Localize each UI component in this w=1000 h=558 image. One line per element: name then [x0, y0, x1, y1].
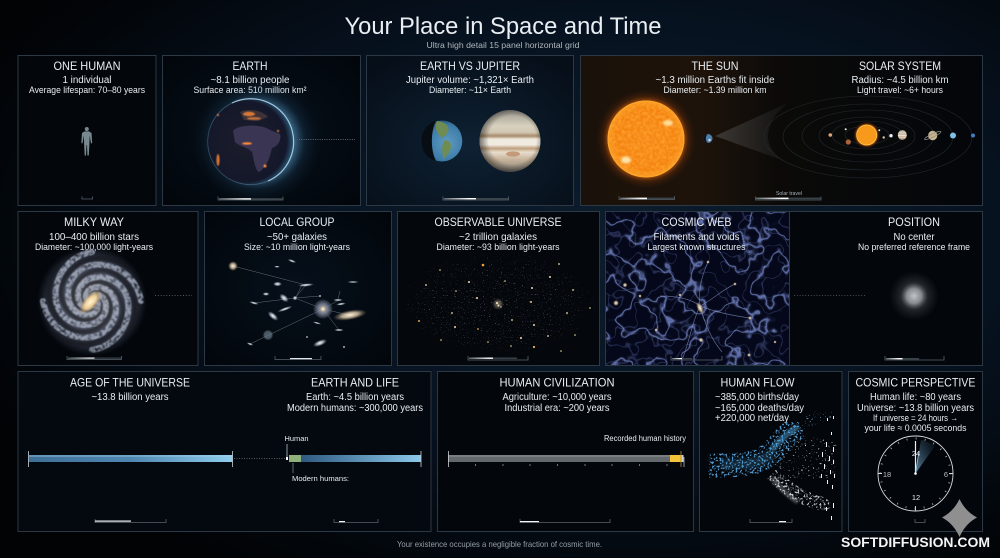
heading: human flow: HUMAN FLOW	[720, 376, 795, 390]
heading: position: POSITION	[888, 215, 940, 229]
stat: size: Size: ~10 million light-years	[244, 242, 350, 253]
label: modern humans: Modern humans:	[292, 474, 349, 483]
scale bar: universe	[468, 356, 528, 360]
chart: galaxy network	[228, 258, 368, 349]
icon: small earth	[704, 134, 712, 143]
stat: surface area: Surface area: 510 million km²	[194, 85, 306, 96]
chart: civilization timeline	[448, 451, 684, 467]
zoom cone	[715, 102, 804, 168]
panel: one human	[18, 56, 156, 206]
scale bar: civilization	[520, 519, 610, 522]
chart: universe age bar	[28, 451, 232, 467]
stat: individual: 1 individual	[62, 75, 112, 86]
panel: sun and solar system	[580, 56, 982, 206]
scale bar: position	[885, 356, 944, 360]
heading: cosmic perspective: COSMIC PERSPECTIVE	[856, 376, 976, 390]
heading: local group: LOCAL GROUP	[260, 215, 334, 229]
stat: jupiter volume: Jupiter volume: ~1,321× Earth	[406, 75, 534, 86]
label: recorded history: Recorded human history	[604, 434, 686, 443]
stat: modern humans: Modern humans: ~300,000 years	[287, 403, 423, 414]
illustration: galaxy field	[398, 251, 598, 355]
chart: 24-hour clock	[878, 436, 953, 511]
stat: industrial era: Industrial era: ~200 years	[504, 403, 610, 414]
stat: radius: Radius: ~4.5 billion km	[852, 75, 948, 86]
scale bar: human	[82, 196, 92, 199]
stat: structures: Largest known structures	[648, 242, 746, 253]
label: human: Human	[284, 434, 308, 443]
subtitle: Ultra high detail 15 panel horizontal grid	[426, 41, 580, 50]
connector: dotted line	[299, 138, 355, 140]
footer note: Your existence occupies a negligible fraction of cosmic time.	[397, 540, 602, 549]
chart: 24-hour clock: 12	[912, 493, 920, 502]
panel: observable universe	[398, 212, 600, 366]
title: Your Place in Space and Time	[344, 13, 662, 40]
illustration: earth at night	[193, 77, 321, 205]
illustration: spiral galaxy	[23, 232, 161, 370]
stat: galaxies: ~2 trillion galaxies	[459, 232, 537, 243]
heading: milky way: MILKY WAY	[64, 215, 124, 229]
chart: 24-hour clock: 24	[912, 449, 920, 458]
stat: population: ~8.1 billion people	[210, 75, 290, 86]
chart: 24-hour clock: 18	[883, 470, 891, 479]
watermark: star logo	[942, 499, 977, 537]
heading: earth and life: EARTH AND LIFE	[311, 376, 399, 390]
scale bar: jupiter comparison	[443, 196, 508, 200]
panel: human civilization	[438, 372, 694, 532]
scale bar: perspective	[915, 519, 925, 522]
heading: observable universe: OBSERVABLE UNIVERSE	[434, 215, 562, 229]
heading: the sun: THE SUN	[692, 59, 738, 73]
scale bar: flow	[750, 519, 792, 522]
scale bar: local group	[275, 356, 321, 360]
heading: earth: EARTH	[232, 59, 268, 73]
heading: age of the universe: AGE OF THE UNIVERSE	[70, 376, 190, 390]
connector: dotted line	[155, 294, 192, 296]
connector: dotted line	[794, 294, 865, 296]
panel: local group	[204, 212, 392, 366]
scale bar: web	[671, 356, 722, 360]
chart: 24-hour clock: 6	[944, 470, 948, 479]
heading: one human: ONE HUMAN	[54, 59, 120, 73]
chart: particle flow	[708, 414, 835, 520]
illustration: jupiter	[480, 110, 540, 172]
heading: human civilization: HUMAN CIVILIZATION	[500, 376, 614, 390]
panel: cosmic web and position	[606, 212, 982, 366]
stat: light travel: Light travel: ~6+ hours	[857, 85, 943, 96]
panel: earth	[162, 56, 360, 206]
illustration: sun	[596, 89, 696, 189]
scale bar: earth	[218, 196, 283, 200]
heading: earth vs jupiter: EARTH VS JUPITER	[420, 59, 520, 73]
scale bar: sun	[619, 196, 674, 200]
stat: no frame: No preferred reference frame	[858, 242, 970, 253]
stat: human life: Human life: ~80 years	[870, 392, 961, 403]
stat: your life: your life ≈ 0.0005 seconds	[864, 423, 967, 434]
panel: cosmic perspective	[848, 372, 982, 532]
illustration: earth	[421, 120, 462, 162]
stat: births: ~385,000 births/day	[715, 392, 799, 403]
stat: diameter: Diameter: ~100,000 light-years	[35, 242, 153, 253]
scale bar: earth	[334, 519, 378, 522]
scale bar: age	[95, 519, 166, 522]
stat: galaxies: ~50+ galaxies	[267, 232, 327, 243]
connector: dotted line	[234, 458, 285, 460]
panel: age and earth timeline	[18, 372, 431, 532]
stat: agriculture: Agriculture: ~10,000 years	[502, 392, 612, 403]
label: solar travel: Solar travel	[776, 191, 802, 197]
stat: sun diameter: Diameter: ~1.39 million km	[664, 85, 767, 96]
stat: diameter: Diameter: ~93 billion light-years	[436, 242, 560, 253]
panel: earth vs jupiter	[366, 56, 574, 206]
stat: earths inside: ~1.3 million Earths fit inside	[656, 75, 775, 86]
panel: human flow	[700, 372, 842, 532]
stat: diameter: Diameter: ~11× Earth	[429, 85, 511, 96]
stat: filaments: Filaments and voids	[654, 232, 740, 243]
stat: earth age: Earth: ~4.5 billion years	[306, 392, 404, 403]
heading: solar system: SOLAR SYSTEM	[859, 59, 941, 73]
icon: human figure	[81, 127, 92, 156]
scale bar: milky way	[67, 356, 122, 360]
stat: deaths: ~165,000 deaths/day	[715, 403, 804, 414]
stat: no center: No center	[894, 232, 935, 243]
stat: if universe is one day: If universe = 24 hours →	[873, 413, 958, 424]
heading: cosmic web: COSMIC WEB	[662, 215, 732, 229]
stat: universe: Universe: ~13.8 billion years	[857, 403, 974, 414]
stat: stars: 100–400 billion stars	[49, 232, 139, 243]
stat: net: +220,000 net/day	[715, 413, 789, 424]
watermark: softdiffusion.com: SOFTDIFFUSION.COM	[841, 534, 990, 550]
chart: earth timeline bar	[286, 444, 421, 473]
stat: age: ~13.8 billion years	[92, 392, 168, 403]
scale bar: solar system	[756, 196, 821, 200]
illustration: centerless point	[889, 271, 939, 321]
illustration: cosmic web	[606, 212, 789, 365]
stat: lifespan: Average lifespan: 70–80 years	[29, 85, 145, 96]
illustration: solar system	[764, 96, 975, 178]
panel: milky way	[18, 212, 198, 370]
